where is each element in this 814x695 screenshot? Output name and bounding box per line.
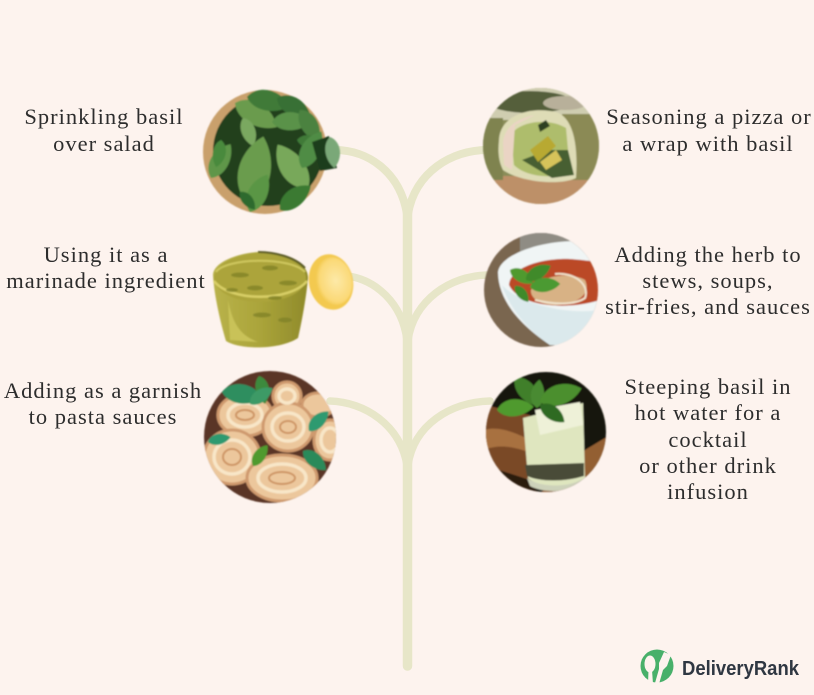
text: steeping: infusion xyxy=(667,479,749,504)
lemon half xyxy=(304,250,358,314)
text: stews: Adding the herb to xyxy=(614,242,802,267)
icon: marinade jar with lemon xyxy=(213,250,358,347)
text: sprinkling basil: Sprinkling basil xyxy=(24,104,184,129)
text: stews: stir-fries, and sauces xyxy=(605,294,811,319)
text: marinade: marinade ingredient xyxy=(6,268,206,293)
icon: basil wrap xyxy=(483,88,602,208)
text: steeping: Steeping basil in xyxy=(624,374,792,399)
text: garnish: Adding as a garnish xyxy=(4,378,202,403)
text: sprinkling basil: over salad xyxy=(53,131,155,156)
text: stews: stews, soups, xyxy=(642,268,774,293)
text: seasoning: a wrap with basil xyxy=(622,131,794,156)
text: steeping: cocktail xyxy=(668,427,748,452)
text: marinade: Using it as a xyxy=(44,242,168,267)
logo: DeliveryRank xyxy=(640,650,800,684)
icon: tomato soup bowl xyxy=(484,233,600,347)
logo mark xyxy=(640,650,674,684)
logo wordmark: DeliveryRank xyxy=(682,658,800,680)
text: steeping: hot water for a xyxy=(635,400,781,425)
text: garnish: to pasta sauces xyxy=(29,404,177,429)
text: steeping: or other drink xyxy=(639,453,777,478)
tree stem and branches xyxy=(330,150,490,666)
icon: bowl of basil salad xyxy=(202,86,342,217)
text: seasoning: Seasoning a pizza or xyxy=(606,104,812,129)
icon: basil cocktail xyxy=(484,372,610,495)
icon: pasta nests xyxy=(204,371,346,503)
basil leaves on pasta xyxy=(207,375,333,475)
